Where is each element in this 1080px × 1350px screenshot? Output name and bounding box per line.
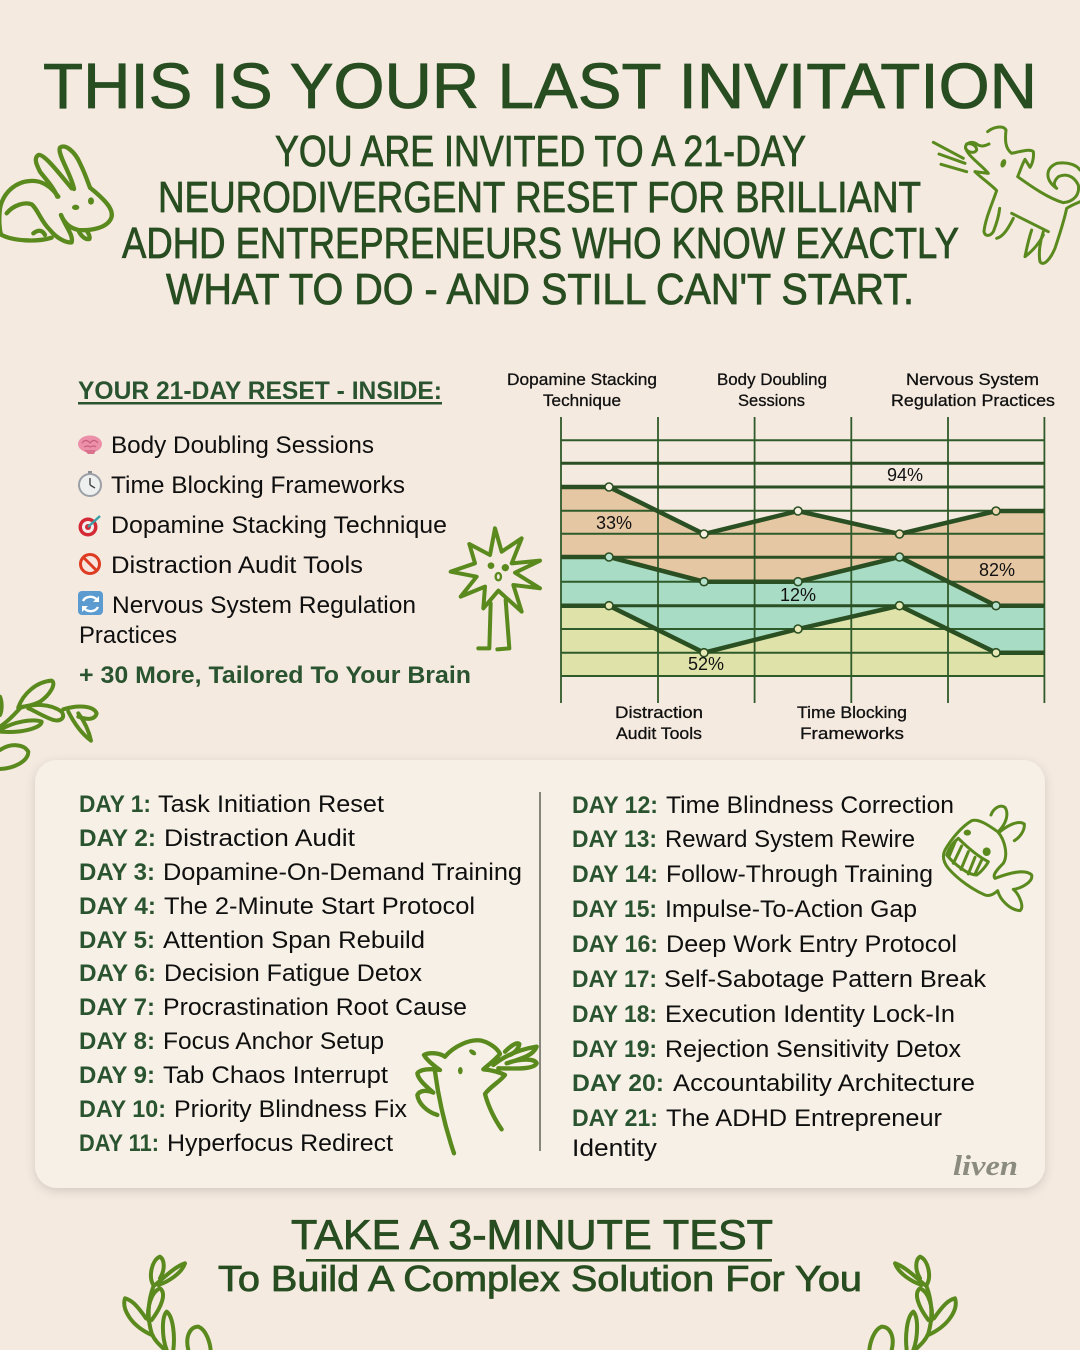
list item: distraction audit: Distraction Audit Tools [111, 552, 363, 579]
icon: leaf sprig left [0, 681, 97, 769]
list item: 30 more: + 30 More, Tailored To Your Brain [79, 662, 471, 689]
day 1: Task Initiation Reset [158, 791, 384, 818]
chart bottom labels: Audit Tools [616, 724, 702, 743]
icon: leaf sprig bottom right [869, 1257, 956, 1350]
chart percent labels [596, 465, 1015, 674]
day 15: DAY 15: [572, 896, 657, 923]
subheading [122, 127, 959, 314]
day 8: DAY 8: [79, 1028, 155, 1055]
chart percent labels: 12% [780, 585, 816, 605]
day 5: DAY 5: [79, 927, 155, 954]
day 10: DAY 10: [79, 1096, 166, 1123]
icon: rabbit doodle [0, 147, 112, 242]
day 17: DAY 17: [572, 966, 657, 993]
day 3: DAY 3: [79, 859, 155, 886]
subheading: WHAT TO DO - AND STILL CAN'T START. [166, 265, 914, 314]
day 7: DAY 7: [79, 994, 155, 1021]
chart top labels: Regulation Practices [891, 391, 1055, 410]
day 4: DAY 4: [79, 893, 156, 920]
day 19: DAY 19: [572, 1036, 657, 1063]
logo: liven: liven [953, 1150, 1018, 1182]
panel: 21-day program [35, 760, 1045, 1188]
day 20: Accountability Architecture [673, 1070, 975, 1097]
day 6: DAY 6: [79, 960, 156, 987]
icon: prohibited [80, 554, 100, 574]
list item: nervous system: Nervous System Regulation [112, 592, 416, 619]
chart top labels: Dopamine Stacking [507, 370, 657, 389]
day 18: Execution Identity Lock-In [665, 1001, 955, 1028]
chart bottom labels [615, 703, 907, 743]
chart top labels: Sessions [738, 391, 805, 410]
icon: chicken doodle [417, 1040, 537, 1153]
list item: time blocking: Time Blocking Frameworks [111, 472, 405, 499]
day 11 [79, 1130, 393, 1157]
day 2 [79, 825, 355, 852]
chart percent labels: 94% [887, 465, 923, 485]
day 12: DAY 12: [572, 792, 658, 819]
chart percent labels: 52% [688, 654, 724, 674]
day 18: DAY 18: [572, 1001, 657, 1028]
chart top labels: Nervous System [906, 370, 1039, 389]
call to action heading: TAKE A 3-MINUTE TEST [291, 1211, 773, 1258]
chart bottom labels: Distraction [615, 703, 703, 722]
icon: brain [78, 436, 102, 454]
day 2: DAY 2: [79, 825, 156, 852]
icon: refresh arrows [78, 591, 103, 615]
day 11: DAY 11: [79, 1130, 159, 1157]
day 20 [572, 1070, 975, 1097]
day 9 [79, 1062, 388, 1089]
icon: spiky star creature [451, 528, 540, 649]
day 8: Focus Anchor Setup [163, 1028, 384, 1055]
day 10 [79, 1096, 407, 1123]
chart top labels [507, 370, 1055, 410]
icon: dog doodle [933, 127, 1080, 263]
title: THIS IS YOUR LAST INVITATION [43, 50, 1037, 122]
day 9: Tab Chaos Interrupt [163, 1062, 388, 1089]
day 1: DAY 1: [79, 791, 151, 818]
chart data points [605, 483, 1000, 657]
chart bottom labels: Frameworks [800, 724, 904, 743]
day 14: Follow-Through Training [666, 861, 933, 888]
call to action subtext: To Build A Complex Solution For You [218, 1258, 862, 1299]
day 2: Distraction Audit [164, 825, 355, 852]
chart bottom labels: Time Blocking [797, 703, 907, 722]
section heading: your 21-day reset: YOUR 21-DAY RESET - INSIDE: [78, 377, 442, 405]
day 11: Hyperfocus Redirect [167, 1130, 393, 1157]
chart series lines [561, 487, 1044, 653]
day 20: DAY 20: [572, 1070, 664, 1097]
chart percent labels: 82% [979, 560, 1015, 580]
chart top labels: Technique [543, 391, 621, 410]
day 16: Deep Work Entry Protocol [666, 931, 957, 958]
day 21: The ADHD Entrepreneur [666, 1105, 942, 1132]
day 3: Dopamine-On-Demand Training [163, 859, 522, 886]
chart filled bands [561, 487, 1044, 676]
subheading: YOU ARE INVITED TO A 21-DAY [275, 127, 806, 176]
chart: stacked area line chart [507, 370, 1055, 743]
day 10: Priority Blindness Fix [174, 1096, 407, 1123]
day 13: Reward System Rewire [665, 826, 915, 853]
day 14: DAY 14: [572, 861, 658, 888]
day 16: DAY 16: [572, 931, 658, 958]
feature list [78, 432, 471, 689]
day 12: Time Blindness Correction [666, 792, 954, 819]
chart top labels: Body Doubling [717, 370, 827, 389]
icon: whale doodle [943, 806, 1032, 911]
day 4: The 2-Minute Start Protocol [164, 893, 475, 920]
chart percent labels: 33% [596, 513, 632, 533]
list item: nervous system: Practices [79, 622, 177, 649]
day 15: Impulse-To-Action Gap [665, 896, 917, 923]
day 13: DAY 13: [572, 826, 657, 853]
icon: stopwatch [79, 471, 101, 496]
day 21: Identity [572, 1135, 657, 1162]
day 17: Self-Sabotage Pattern Break [664, 966, 987, 993]
day 21: DAY 21: [572, 1105, 658, 1132]
day 7: Procrastination Root Cause [163, 994, 467, 1021]
icon: leaf sprig bottom left [124, 1257, 211, 1350]
list item: nervous system [79, 592, 416, 649]
day 21 [572, 1105, 942, 1162]
list item: dopamine stacking: Dopamine Stacking Technique [111, 512, 447, 539]
list item: body doubling: Body Doubling Sessions [111, 432, 374, 459]
day 19: Rejection Sensitivity Detox [665, 1036, 961, 1063]
day 6: Decision Fatigue Detox [164, 960, 422, 987]
day 9: DAY 9: [79, 1062, 155, 1089]
icon: target [78, 516, 100, 536]
day 5: Attention Span Rebuild [163, 927, 425, 954]
subheading: NEURODIVERGENT RESET FOR BRILLIANT [158, 173, 921, 222]
